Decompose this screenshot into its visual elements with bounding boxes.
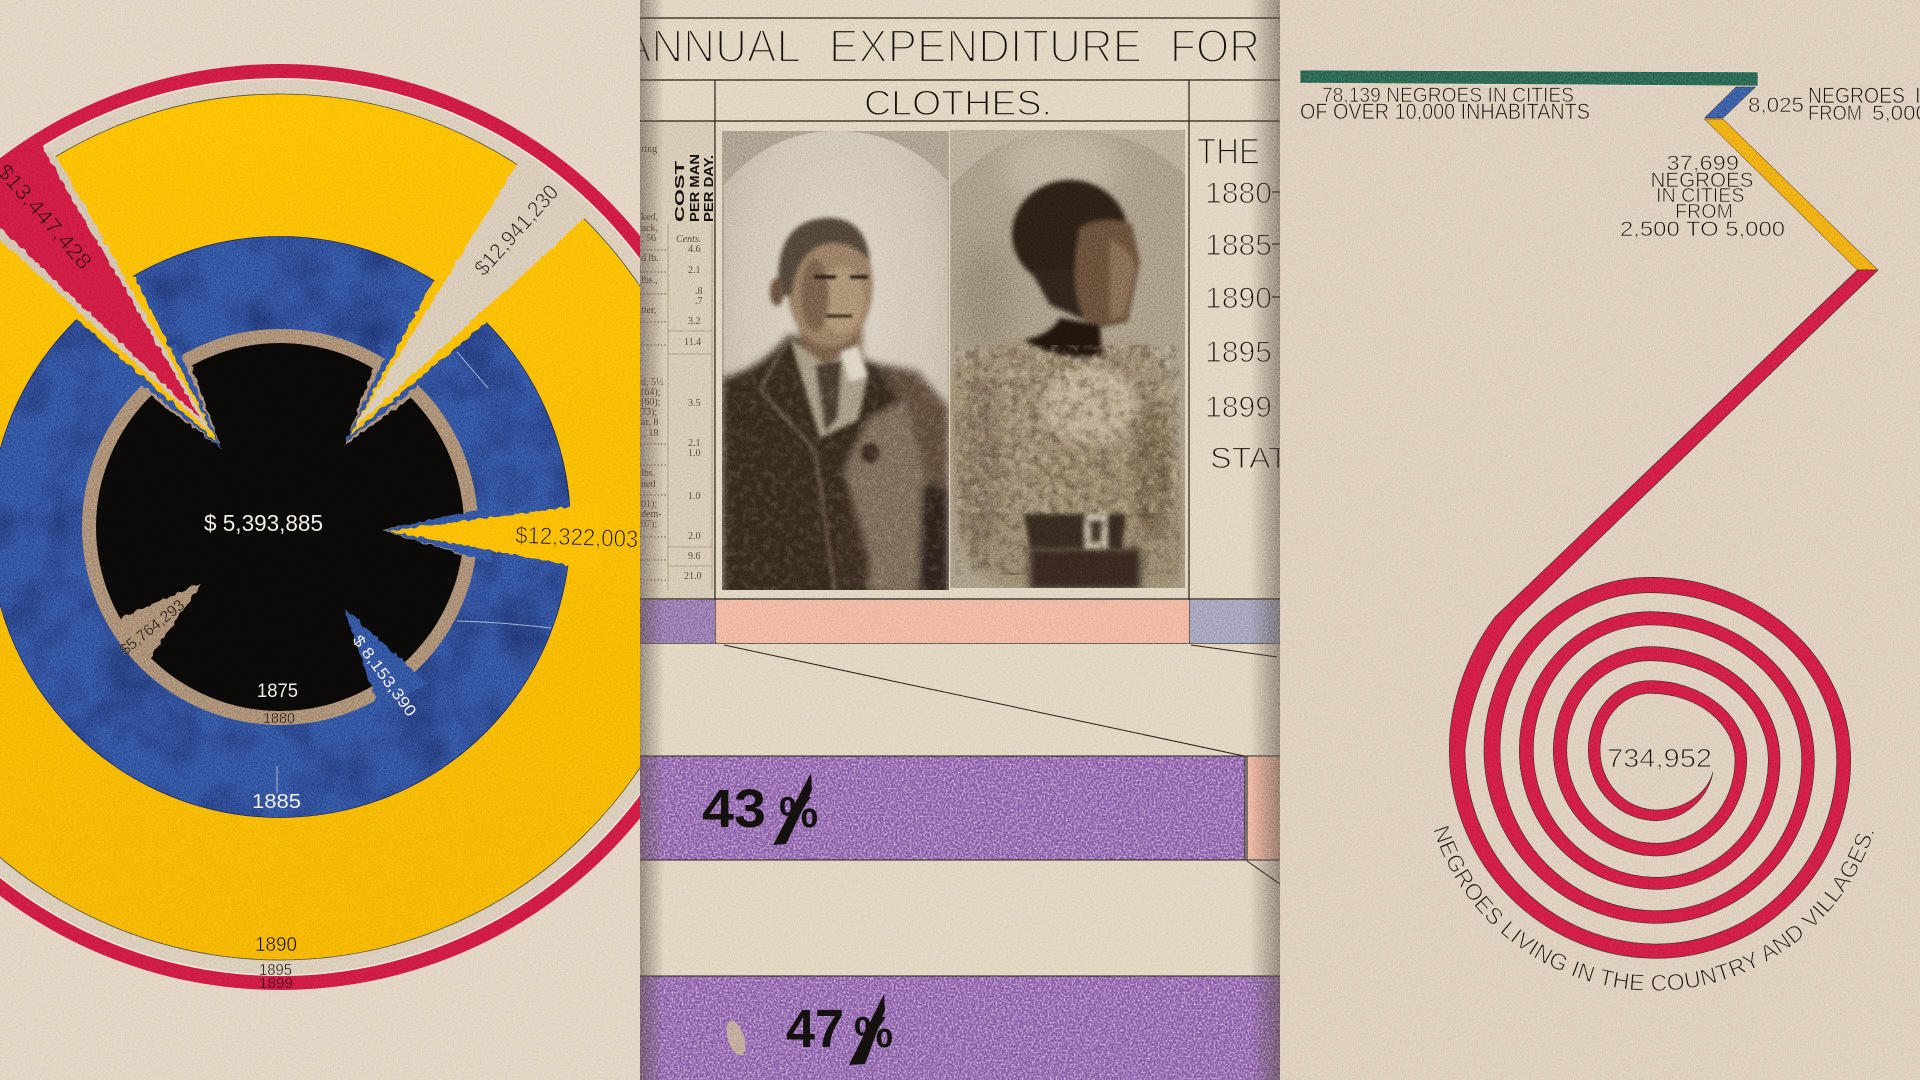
printed food cost column: 07); [641,519,657,530]
printed food cost column: 73); [641,407,657,418]
bar: 43 percent purple [640,756,1280,860]
printed food cost column: 3.5 [688,398,700,409]
label: 734,952: 734,952 [1607,743,1712,773]
printed food cost column: 1.0 [688,491,700,502]
label: 78,139 cities: 78,139 NEGROES IN CITIES [1322,84,1574,107]
printed food cost column: 21.0 [684,571,702,582]
text list: the years column: 1899 [1205,391,1272,424]
printed food cost column: ked, [641,212,658,223]
printed food cost column: 2.0 [688,531,700,542]
wedge: 1895 upper-left jagged red spike [0,144,221,448]
year label 1885: 1885 [252,791,301,813]
printed food cost column: lbs. [641,468,655,479]
printed food cost column: .8 [695,286,702,297]
printed food cost column: Cents. [676,234,701,245]
year label 1875: 1875 [257,681,298,702]
label: 8,025 cities: NEGROES [1808,83,1905,108]
title: annual expenditure for: FOR [1170,20,1260,72]
printed food cost column: (64); [641,387,661,398]
colored row: purple, salmon, slate cells [640,600,1280,643]
panel: left circular chart of property valuation [0,64,640,990]
year label 1880: 1880 [263,710,295,727]
text list: the years column: THE [1197,131,1260,172]
printed food cost column: PER DAY. [701,155,716,222]
label: 5,393,885: $ 5,393,885 [204,510,323,536]
year label 1895: 1895 [259,962,292,979]
label: 78,139 cities [1300,84,1590,124]
text list: the years column: 1890 [1205,282,1272,315]
segment: green cities over 10,000 [1300,70,1758,86]
printed food cost column: 9.6 [688,551,700,562]
printed food cost column: uck, [641,223,658,234]
photo: young man in suit [722,131,949,600]
label: negroes living in the country and villages: NEGROES LIVING IN THE COUNTRY AND VILLAGES. [1434,826,1874,991]
wedge: lower-right blue spike [344,609,429,701]
value: 43%: 43 [702,779,766,839]
year label 1899: 1899 [259,975,293,992]
year label 1890: 1890 [255,934,297,956]
value: 47%: % [854,1008,893,1057]
value: 43%: % [779,788,818,837]
printed food cost column: ned [641,479,655,490]
label: 37,699 cities [1620,152,1785,241]
label: 12,941,230: $12,941,230 [469,180,563,280]
printed food cost column: lbs., [641,275,658,286]
segment: yellow cities 2,500 to 5,000 [1704,119,1878,270]
printed food cost column: d lb. [641,253,659,264]
title: annual expenditure for [640,30,1256,62]
text list: the years column: 1895 [1205,336,1272,369]
printed food cost column: 2.1 [688,438,700,449]
printed food cost column: d, 5½ [641,377,664,388]
printed food cost column: dem- [641,509,662,520]
segment: blue cities 5,000 to 10,000 [1704,87,1756,118]
label: 12,322,003: $12,322,003 [515,522,639,553]
label: 8,153,390: $ 8,153,390 [349,632,419,720]
wedge: lower-left tan spike [116,584,201,658]
title: annual expenditure for: ANNUAL [622,20,801,72]
printed food cost column [640,144,716,590]
panel: right population line chart [1300,70,1920,991]
printed food cost column: ring [641,144,657,155]
fold shadows [640,0,664,1080]
printed food cost column: 01); [641,499,657,510]
title: annual expenditure for: EXPENDITURE [829,20,1142,72]
label: 8,025 cities: FROM [1808,102,1862,125]
photo: young woman in blouse [950,125,1185,590]
printed food cost column: ar, 8 [641,417,658,428]
heading: clothes: CLOTHES. [864,84,1052,123]
label: 37,699 cities: FROM [1675,201,1733,223]
segment: red spiral of country and villages [1449,270,1878,958]
value: 43% [702,773,818,845]
printed food cost column: tter, [641,305,656,316]
text list: the years column [1197,131,1288,475]
label: 37,699 cities: 37,699 [1666,152,1739,175]
text list: the years column: 1880 [1205,177,1272,210]
printed food cost column: 3.2 [688,316,700,327]
label: 37,699 cities: 2,500 TO 5,000 [1620,218,1785,241]
value: 47% [786,994,893,1065]
label: 8,025 cities [1748,83,1920,125]
wedge: upper-right jagged beige spike [344,156,590,446]
printed food cost column: .7 [695,296,702,307]
printed food cost column: , 56 [641,233,656,244]
scratches on blue ring [277,352,551,793]
printed food cost column: 1.0 [688,448,700,459]
panel: middle annual expenditure table [622,0,1288,1080]
value: 47%: 47 [786,999,844,1059]
text list: the years column: STAT [1210,442,1288,475]
circular chart rings [0,64,640,990]
label: 5,764,293: $5,764,293 [117,597,188,659]
printed food cost column: (60); [641,397,661,408]
text list: the years column: 1885 [1205,229,1272,262]
printed food cost column: ., 18 [641,428,658,439]
wedge: right jagged yellow spike [382,506,571,566]
printed food cost column: PER MAN [687,154,702,222]
printed food cost column: COST [672,161,687,222]
table rules [640,18,1280,884]
label: 78,139 cities: OF OVER 10,000 INHABITANTS [1300,99,1590,124]
label: 8,025 cities: 8,025 [1748,94,1804,117]
label: 37,699 cities: NEGROES [1650,169,1754,192]
label: 37,699 cities: IN CITIES [1656,185,1744,207]
printed food cost column: 11.4 [684,337,701,348]
bar: 47 percent purple [640,976,1280,1080]
printed food cost column: 4.6 [688,244,700,255]
printed food cost column: 2.1 [688,265,700,276]
